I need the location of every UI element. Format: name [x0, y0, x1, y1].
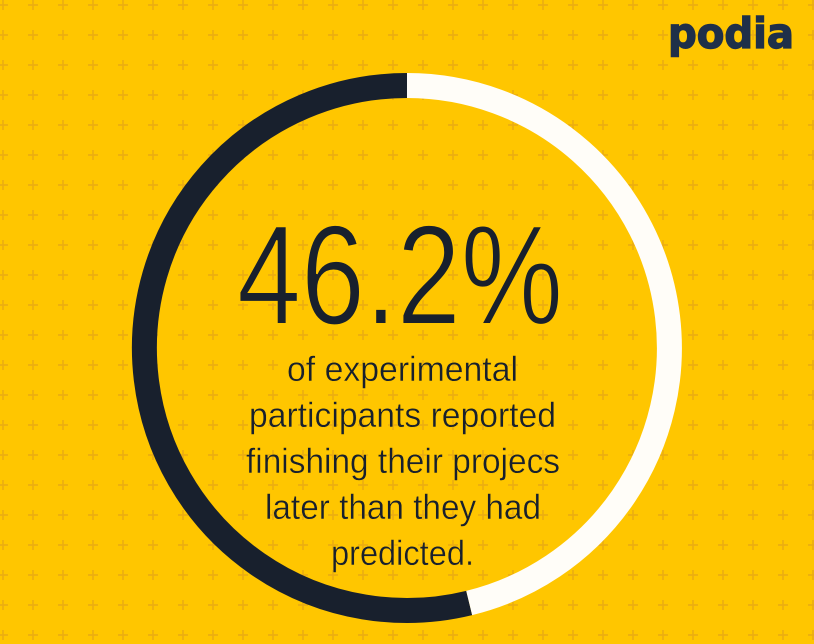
- description text: predicted.: [331, 534, 474, 573]
- donut chart: 46.2%: [144, 85, 669, 610]
- description text: of experimental: [287, 350, 518, 389]
- description text: later than they had: [265, 488, 541, 527]
- big number: 46.2%: [237, 196, 563, 355]
- ring segment: 46.2% share: [407, 86, 669, 603]
- ring segment: remaining share: [144, 85, 469, 610]
- description text: participants reported: [249, 396, 556, 435]
- description text: [246, 350, 560, 573]
- description text: finishing their projecs: [246, 442, 560, 481]
- logo: podia: podia: [668, 9, 794, 58]
